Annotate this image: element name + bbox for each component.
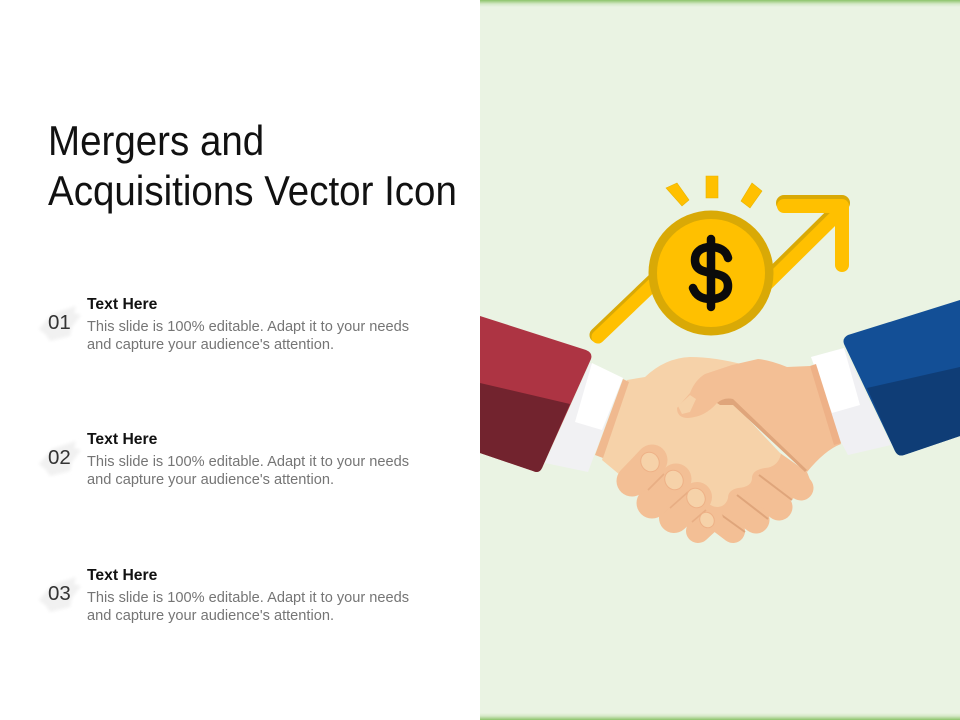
right hand fingers xyxy=(705,453,813,538)
dollar sign xyxy=(693,239,728,307)
right shirt cuff xyxy=(811,348,891,455)
left hand xyxy=(595,357,781,507)
right arm: blue sleeve xyxy=(844,300,960,456)
list item 01 xyxy=(40,296,409,353)
icon: growth arrow xyxy=(597,203,842,337)
left hand fingers xyxy=(632,449,717,531)
number 03: 03 xyxy=(48,582,71,605)
number smudge 02 xyxy=(40,442,79,475)
number smudge 03 xyxy=(40,578,79,611)
illustration: handshake and dollar growth icon xyxy=(480,176,960,543)
left shirt cuff xyxy=(545,363,623,472)
body text 01: and capture your audience's attention. xyxy=(87,337,334,353)
number 01: 01 xyxy=(48,311,71,334)
title: Acquisitions Vector Icon xyxy=(48,167,457,214)
list item 02 xyxy=(40,431,409,488)
body text 03: This slide is 100% editable. Adapt it to your needs xyxy=(87,590,409,606)
fingernails xyxy=(637,449,717,530)
body text 02: This slide is 100% editable. Adapt it to your needs xyxy=(87,454,409,470)
right hand palm and thumb xyxy=(677,359,841,472)
body text 03 xyxy=(87,590,409,624)
left arm: red sleeve xyxy=(480,316,591,472)
number smudge 01 xyxy=(40,308,79,340)
icon: dollar coin xyxy=(648,210,774,336)
body text 02: and capture your audience's attention. xyxy=(87,472,334,488)
panel: green background xyxy=(480,0,960,720)
list item 03 xyxy=(40,567,409,624)
body text 01 xyxy=(87,319,409,353)
number 02: 02 xyxy=(48,446,71,469)
body text 03: and capture your audience's attention. xyxy=(87,608,334,624)
icon: rays xyxy=(666,176,762,208)
body text 02 xyxy=(87,454,409,488)
heading 03: Text Here xyxy=(87,567,157,584)
title xyxy=(48,117,457,214)
heading 02: Text Here xyxy=(87,431,157,448)
heading 01: Text Here xyxy=(87,296,157,313)
body text 01: This slide is 100% editable. Adapt it to your needs xyxy=(87,319,409,335)
title: Mergers and xyxy=(48,117,264,164)
thumb nail xyxy=(678,395,696,414)
